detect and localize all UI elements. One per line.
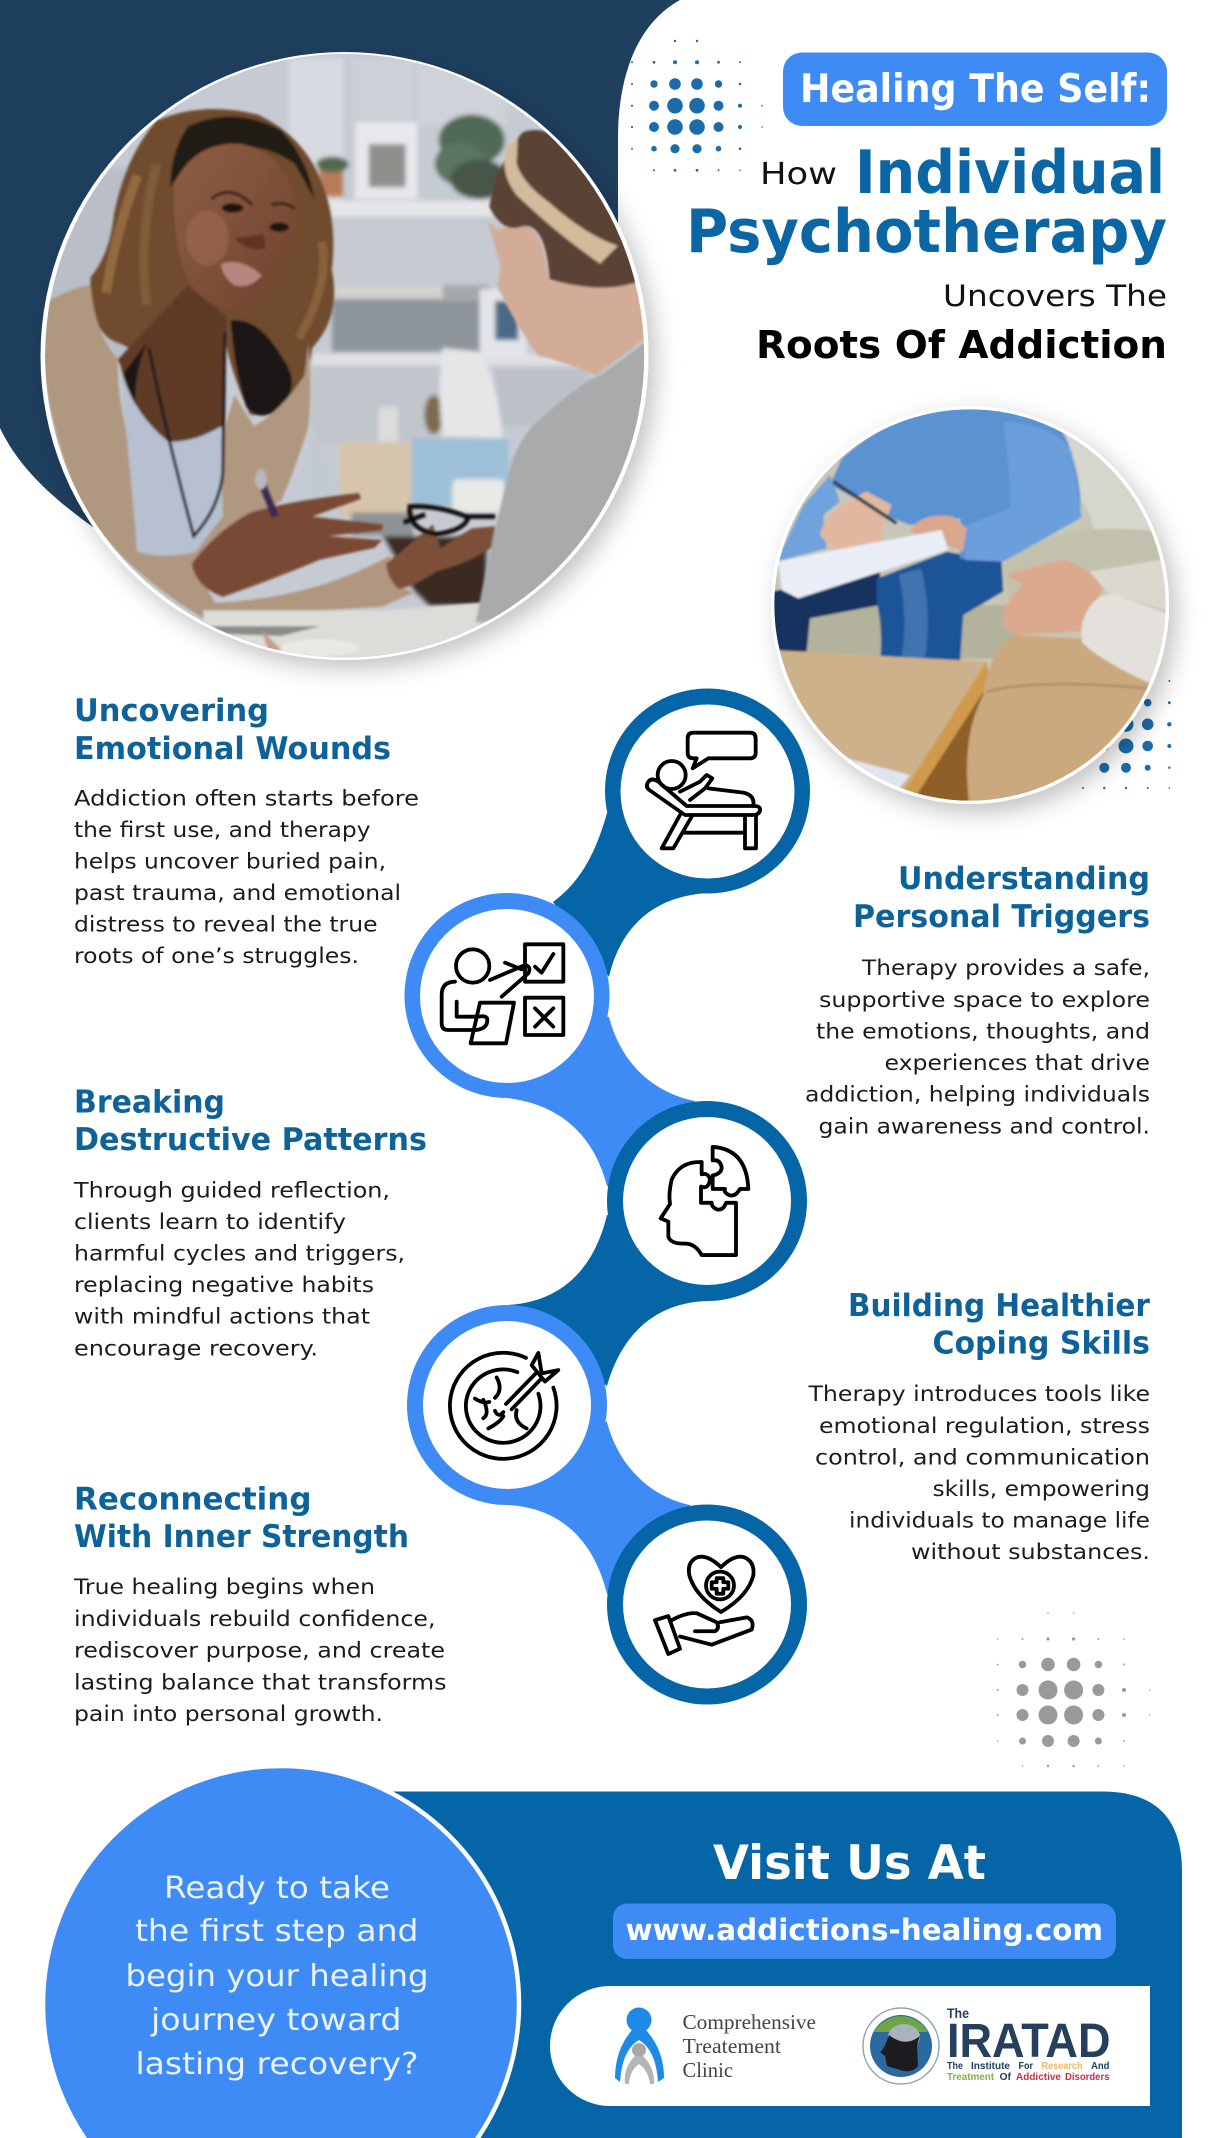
connector 1-2 xyxy=(553,791,707,977)
body copy: clients learn to identify xyxy=(74,1210,346,1235)
body copy: individuals to manage life xyxy=(849,1508,1150,1534)
glasses xyxy=(404,506,495,534)
call to action circle xyxy=(43,1766,519,2138)
badge 3: ring xyxy=(607,1101,807,1301)
website pill xyxy=(613,1904,1116,1959)
title block xyxy=(686,52,1167,367)
heading: Reconnecting xyxy=(74,1482,312,1518)
text block: Building Healthier Coping Skills xyxy=(807,1288,1151,1565)
body copy: lasting balance that transforms xyxy=(74,1670,446,1696)
heading xyxy=(74,693,391,767)
top decorative dot pattern xyxy=(631,40,763,172)
heading: With Inner Strength xyxy=(74,1519,409,1555)
body copy: helps uncover buried pain, xyxy=(74,850,386,874)
badge 5: ring xyxy=(607,1504,807,1704)
call to action text: begin your healing xyxy=(126,1959,428,1994)
connector 2-3 xyxy=(507,995,707,1201)
logo: Comprehensive Treatement Clinic: Comprehensive xyxy=(682,2010,816,2034)
clasped hands xyxy=(1003,560,1103,635)
icon: target with arrow xyxy=(450,1353,558,1459)
body copy: True healing begins when xyxy=(73,1575,375,1600)
text block: Uncovering Emotional Wounds xyxy=(74,693,419,969)
body copy: rediscover purpose, and create xyxy=(74,1638,445,1664)
logo: IRATAD: Of xyxy=(1000,2071,1011,2083)
client: shirt xyxy=(476,338,651,622)
heading xyxy=(853,861,1150,935)
connector 3-4 xyxy=(507,1201,707,1386)
body copy: control, and communication xyxy=(815,1446,1150,1470)
client: headband xyxy=(504,138,618,264)
icon: hand holding heart with cross xyxy=(655,1557,754,1654)
body copy: emotional regulation, stress xyxy=(819,1414,1150,1439)
body copy: experiences that drive xyxy=(884,1051,1150,1076)
body copy: without substances. xyxy=(911,1540,1150,1565)
chain of circular icon badges xyxy=(404,688,810,1704)
footer panel xyxy=(380,1792,1182,2138)
title pill xyxy=(783,52,1167,126)
logo: IRATAD: And xyxy=(1091,2060,1110,2072)
body copy: skills, empowering xyxy=(932,1477,1150,1502)
logo: IRATAD: IRATAD xyxy=(947,2015,1110,2068)
heading xyxy=(74,1482,409,1555)
text block: Reconnecting With Inner Strength xyxy=(73,1482,446,1727)
body copy: addiction, helping individuals xyxy=(805,1082,1150,1108)
title line: How: How xyxy=(760,157,837,192)
call to action text xyxy=(126,1871,428,2082)
body copy: distress to reveal the true xyxy=(74,912,378,938)
woman: hair xyxy=(90,109,334,415)
body copy xyxy=(805,956,1150,1140)
woman: cardigan xyxy=(44,285,413,618)
icon: head with puzzle piece xyxy=(661,1147,748,1255)
text block: Understanding Personal Triggers xyxy=(805,861,1150,1140)
title line: Healing The Self: Healing The Self: xyxy=(800,67,1151,112)
logo: IRATAD: Institute xyxy=(971,2060,1010,2072)
notepad xyxy=(778,530,948,598)
badge 4: ring xyxy=(407,1305,607,1505)
logo: IRATAD: The xyxy=(947,2060,963,2072)
heading: Uncovering xyxy=(74,693,269,729)
photo: therapist with client xyxy=(40,50,651,665)
logo bar xyxy=(550,1986,1150,2106)
logo: Comprehensive Treatement Clinic: Clinic xyxy=(682,2058,733,2082)
photo: notes and clasped hands xyxy=(770,405,1175,810)
body copy xyxy=(807,1382,1150,1565)
heading xyxy=(848,1288,1151,1362)
heading: Emotional Wounds xyxy=(74,731,391,767)
body copy: supportive space to explore xyxy=(819,988,1150,1013)
body copy: with mindful actions that xyxy=(74,1304,370,1330)
woman: hands xyxy=(192,493,382,597)
body copy xyxy=(74,786,419,969)
body copy: the first use, and therapy xyxy=(74,818,371,843)
woman: top xyxy=(120,364,223,556)
heading: Personal Triggers xyxy=(853,899,1150,935)
icon: patient on couch xyxy=(647,733,760,848)
beige trousers xyxy=(966,634,1150,801)
logo: IRATAD: Research xyxy=(1042,2060,1082,2072)
logo: IRATAD: Disorders xyxy=(1065,2071,1110,2083)
decorative grey dot pattern xyxy=(997,1612,1150,1767)
heading: Destructive Patterns xyxy=(74,1122,427,1158)
title line: Individual: Individual xyxy=(855,138,1165,208)
heading: Visit Us At: Visit Us At xyxy=(713,1836,986,1891)
heading: Breaking xyxy=(74,1084,225,1120)
call to action text: journey toward xyxy=(150,2003,402,2038)
woman: neck and chest xyxy=(118,285,227,442)
body copy xyxy=(73,1178,405,1362)
heading: Understanding xyxy=(898,861,1150,897)
sweater xyxy=(830,405,1081,562)
heading: Building Healthier xyxy=(848,1288,1151,1324)
body copy: harmful cycles and triggers, xyxy=(74,1242,405,1266)
connector 4-5 xyxy=(507,1405,707,1604)
client: face and neck xyxy=(487,219,649,375)
cream sleeves xyxy=(1090,558,1170,612)
desk papers xyxy=(203,603,480,665)
logo: Comprehensive Treatement Clinic xyxy=(615,2008,816,2084)
writing hand xyxy=(820,492,892,555)
title line: Roots Of Addiction: Roots Of Addiction xyxy=(756,323,1167,367)
logo: IRATAD: For xyxy=(1018,2060,1033,2072)
body copy: the emotions, thoughts, and xyxy=(816,1020,1150,1044)
body copy: individuals rebuild confidence, xyxy=(74,1607,436,1632)
badge 2: ring xyxy=(404,893,610,1098)
website pill: www.addictions-healing.com xyxy=(626,1913,1103,1947)
body copy: encourage recovery. xyxy=(74,1336,318,1362)
woman: face xyxy=(174,144,297,311)
call to action text: the first step and xyxy=(135,1914,418,1949)
logo: IRATAD: Treatment xyxy=(947,2071,994,2083)
badge 1: ring xyxy=(605,688,810,894)
body copy: roots of one’s struggles. xyxy=(74,944,359,969)
call to action text: Ready to take xyxy=(164,1871,390,1906)
body copy: gain awareness and control. xyxy=(818,1114,1150,1140)
body copy: Therapy provides a safe, xyxy=(861,956,1150,981)
body copy: Therapy introduces tools like xyxy=(807,1382,1150,1407)
body copy: pain into personal growth. xyxy=(74,1702,383,1727)
call to action text: lasting recovery? xyxy=(136,2047,418,2082)
icon: person choosing check or cross xyxy=(442,944,563,1043)
heading: Coping Skills xyxy=(932,1326,1150,1362)
logo: IRATAD: Addictive xyxy=(1016,2071,1061,2083)
body copy: Through guided reflection, xyxy=(73,1178,390,1204)
table xyxy=(779,648,986,790)
heading xyxy=(74,1084,427,1158)
dark thigh and jeans xyxy=(770,572,880,652)
body copy: replacing negative habits xyxy=(74,1273,374,1298)
navy header background shape xyxy=(0,0,680,530)
body copy: Addiction often starts before xyxy=(74,786,419,812)
logo: Comprehensive Treatement Clinic: Treatement xyxy=(682,2034,781,2058)
client: hair xyxy=(489,130,639,288)
logo: IRATAD xyxy=(863,2005,1110,2084)
title line: Psychotherapy: Psychotherapy xyxy=(686,197,1167,267)
logo: IRATAD: The xyxy=(947,2005,969,2021)
body copy xyxy=(73,1575,446,1727)
body copy: past trauma, and emotional xyxy=(74,881,401,906)
title line: Uncovers The: Uncovers The xyxy=(943,279,1167,313)
text block: Breaking Destructive Patterns xyxy=(73,1084,427,1362)
bottom-right accent dots behind small photo xyxy=(1082,680,1172,789)
